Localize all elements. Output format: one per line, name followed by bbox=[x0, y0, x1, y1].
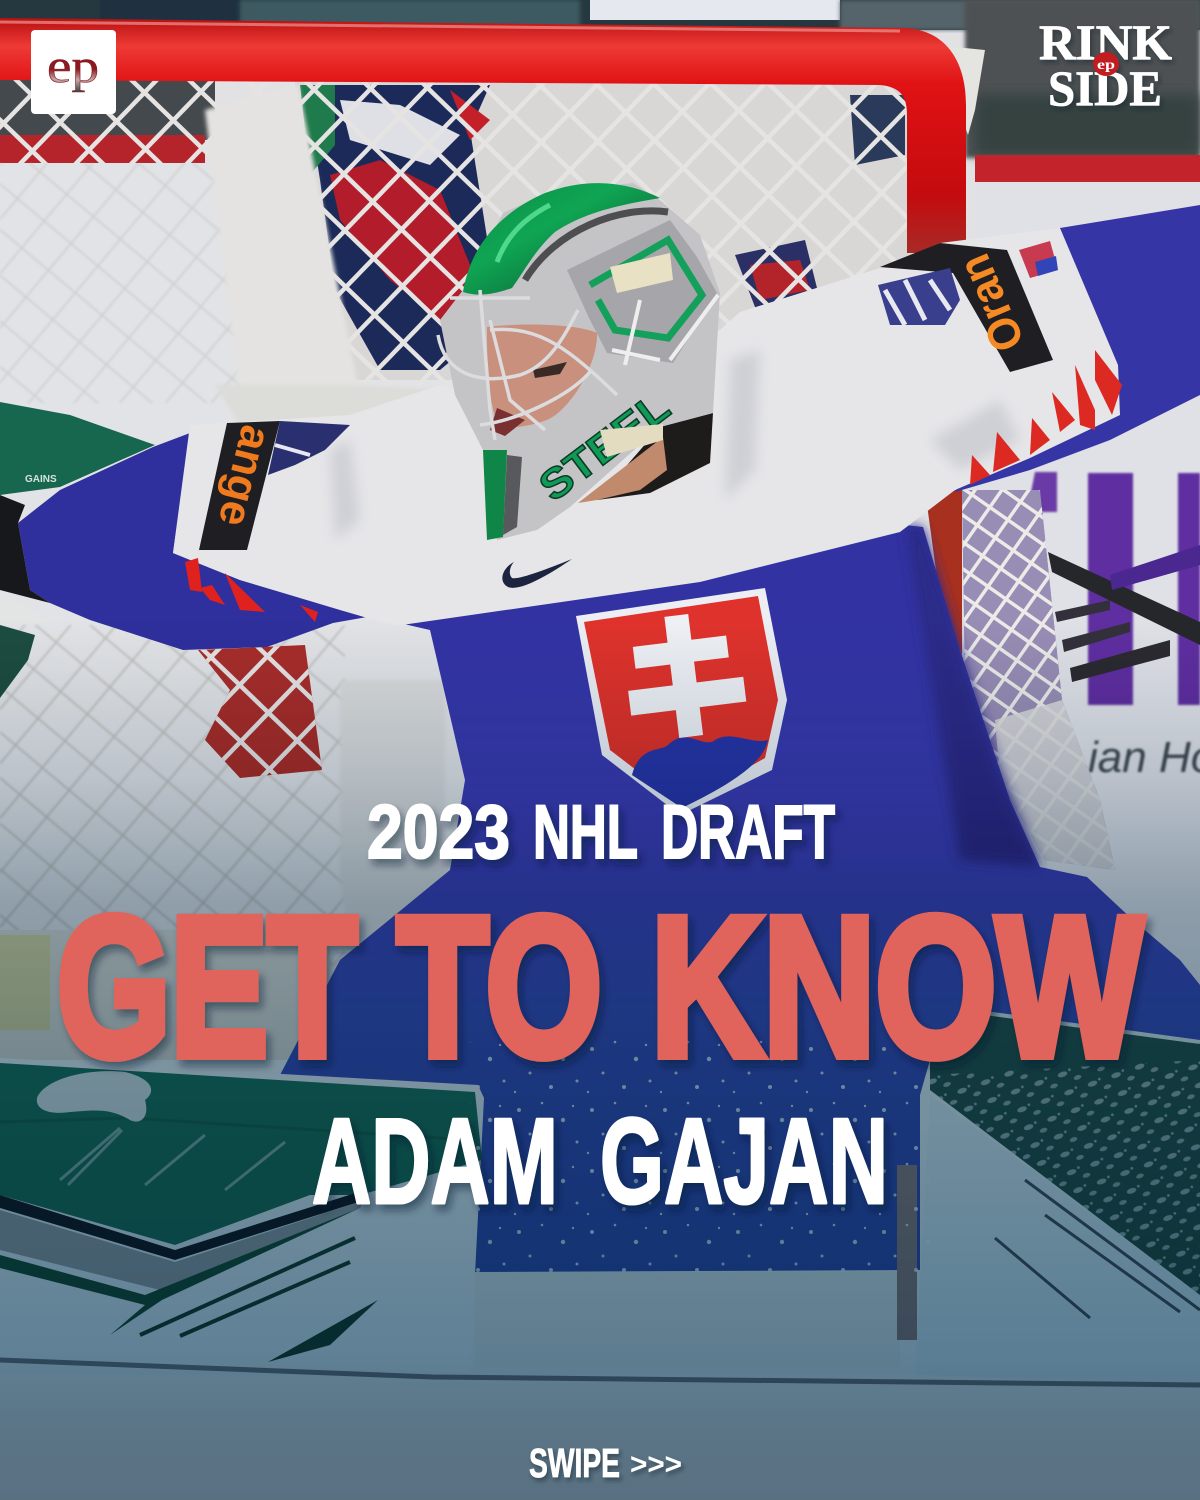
heading: player name: ADAM bbox=[312, 1093, 558, 1229]
ice spray bbox=[470, 1040, 930, 1275]
ep badge: ep bbox=[1097, 58, 1115, 73]
STEEL mask text: STEEL bbox=[530, 382, 678, 510]
goal line on ice bbox=[0, 1360, 1200, 1385]
blocker: GAINS bbox=[25, 474, 57, 485]
heading: Get to know: GET bbox=[57, 876, 357, 1097]
heading: 2023 NHL Draft bbox=[367, 790, 835, 875]
player: goalie bbox=[0, 183, 1200, 1272]
heading: player name: GAJAN bbox=[600, 1093, 888, 1229]
arm band right: Orange sponsor bbox=[878, 241, 1058, 372]
white jersey bbox=[173, 228, 1120, 626]
red net patch left of torso bbox=[198, 645, 322, 778]
heading: 2023 NHL Draft: 2023 bbox=[367, 790, 510, 875]
right side background bbox=[965, 0, 1200, 158]
swipe prompt: SWIPE bbox=[529, 1440, 620, 1486]
mask hexagon logo bbox=[567, 220, 717, 363]
blocker bbox=[0, 402, 155, 698]
face bbox=[487, 325, 597, 427]
Rink Side logo: RINK bbox=[1039, 14, 1172, 70]
bottom fade overlay bbox=[0, 620, 1200, 1500]
heading: 2023 NHL Draft: DRAFT bbox=[661, 790, 835, 875]
right side pad and snow bbox=[915, 1095, 1200, 1385]
lower boards and ice bbox=[0, 930, 330, 1065]
arm band left: Orange sponsor: ange bbox=[209, 421, 281, 531]
arm band right: Orange sponsor: Oran bbox=[947, 247, 1034, 359]
side net bbox=[962, 490, 1115, 870]
purple board lettering bbox=[1027, 472, 1200, 782]
heading: Get to know bbox=[57, 876, 1143, 1097]
arm band left: Orange sponsor bbox=[199, 421, 350, 550]
heading: 2023 NHL Draft: NHL bbox=[533, 790, 638, 875]
Rink Side logo bbox=[1039, 14, 1172, 116]
sleeve zigzag right bbox=[970, 350, 1122, 485]
red goal frame bbox=[0, 18, 985, 655]
chin bbox=[483, 450, 507, 540]
crowd seen through net bbox=[0, 80, 920, 390]
cage bars bbox=[438, 290, 617, 440]
goal post padding bbox=[205, 84, 450, 950]
sleeve zigzag left bbox=[185, 558, 318, 622]
jersey folds bbox=[330, 350, 1020, 540]
torso bbox=[280, 525, 1200, 1272]
ep logo: ep bbox=[47, 40, 99, 93]
Rink Side logo: SIDE bbox=[1048, 60, 1162, 116]
slovak crest bbox=[576, 588, 787, 815]
goalie leg pads bbox=[0, 1013, 1200, 1385]
right sleeve bbox=[955, 205, 1200, 492]
goalie mask bbox=[438, 183, 720, 540]
heading: Get to know: TO bbox=[397, 876, 602, 1097]
neck bbox=[597, 413, 713, 500]
heading: player name bbox=[312, 1093, 888, 1229]
pad logo blob bbox=[37, 1071, 151, 1122]
nike swoosh bbox=[502, 559, 572, 588]
hockey stick bbox=[1048, 545, 1200, 682]
ep logo bbox=[31, 30, 116, 114]
swipe prompt: >>> bbox=[630, 1448, 682, 1481]
left sleeve bbox=[18, 433, 367, 650]
